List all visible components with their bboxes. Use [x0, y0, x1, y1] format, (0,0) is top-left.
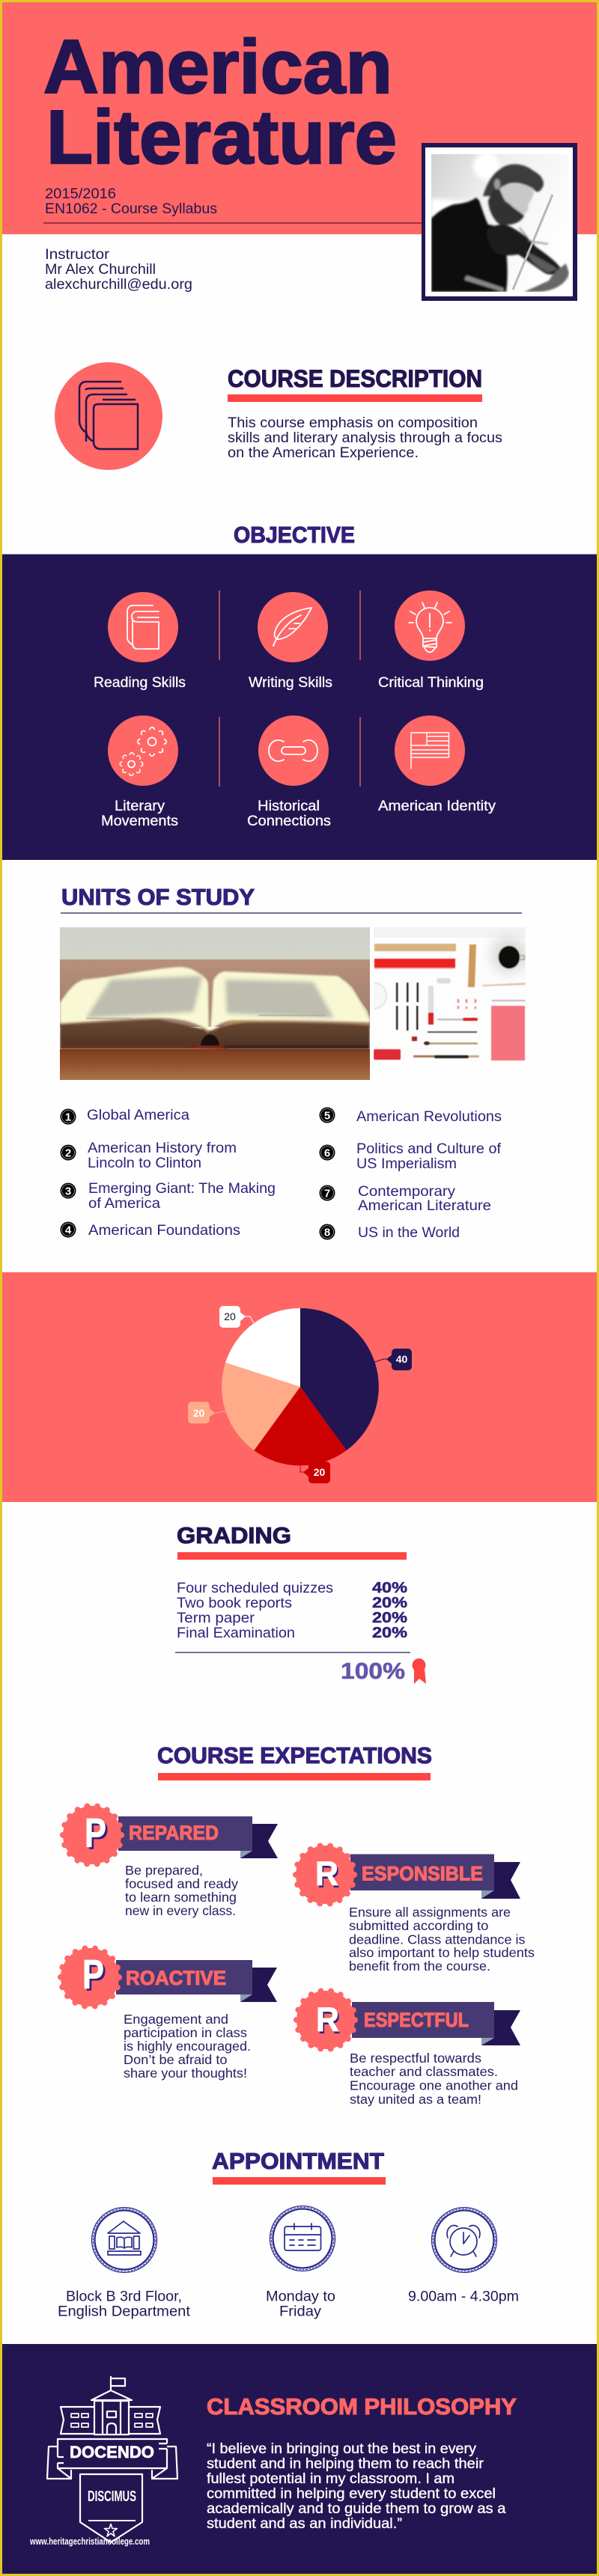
text block: teacher and classmates. — [350, 2064, 498, 2079]
icon: alarm clock — [431, 2208, 497, 2272]
text block: quote: student and as an individual.” — [207, 2516, 402, 2532]
text block: new in every class. — [125, 1903, 236, 1918]
text block: objective labels — [94, 675, 496, 829]
badge: P — [85, 1810, 106, 1856]
shield — [80, 2474, 142, 2542]
icon: location building — [91, 2208, 157, 2272]
text block: instructor: alexchurchill@edu.org — [45, 277, 192, 293]
building — [61, 2376, 160, 2435]
callout: 40 navy — [374, 1349, 412, 1370]
badge — [296, 1846, 354, 1904]
text block: course code: EN1062 - Course Syllabus — [45, 201, 217, 217]
text block: to learn something — [125, 1890, 237, 1905]
icon: reading skills — [108, 592, 178, 662]
text block: appointment details — [58, 2289, 519, 2320]
list item 6: Politics and Culture of — [356, 1141, 502, 1157]
icon: american identity — [395, 715, 465, 786]
text block: course description — [228, 415, 502, 461]
list item 2: Lincoln to Clinton — [88, 1156, 201, 1171]
expectation: proactive: ROACTIVE — [126, 1967, 226, 1989]
text block: course code: 2015/2016 — [45, 186, 116, 202]
heading: grading — [177, 1522, 407, 1560]
text block: quote: academically and to guide them to grow as a — [207, 2501, 506, 2517]
text block: course description: skills and literary analysis through a focus — [228, 430, 502, 446]
photo: violinist in framed portrait — [422, 143, 577, 301]
text block: objective labels: Historical — [258, 799, 320, 814]
list item 5: American Revolutions — [356, 1109, 502, 1125]
panel: objective — [2, 554, 597, 860]
heading: units of study: UNITS OF STUDY — [61, 884, 255, 910]
list item 2 — [60, 1141, 237, 1171]
list item 7 — [319, 1184, 491, 1214]
text block: appointment details: English Department — [58, 2304, 191, 2320]
heading: course expectations — [157, 1742, 432, 1780]
text block: deadline. Class attendance is — [349, 1932, 526, 1947]
list item 4: American Foundations — [88, 1223, 240, 1239]
text block: benefit from the course. — [349, 1959, 490, 1974]
text block: appointment details: 9.00am - 4.30pm — [408, 2289, 519, 2305]
list item 7: Contemporary — [358, 1184, 456, 1200]
text block: Be prepared, — [125, 1863, 203, 1878]
heading: classroom philosophy: CLASSROOM PHILOSOPHY — [207, 2393, 517, 2420]
list item 5: 5 — [324, 1109, 330, 1123]
banner — [47, 2439, 177, 2479]
heading: grading: GRADING — [177, 1522, 291, 1548]
expectation: proactive — [61, 1948, 277, 2081]
table: grading breakdown: Four scheduled quizzes — [177, 1581, 333, 1596]
shield: DISCIMUS — [88, 2488, 136, 2505]
list item 2: 2 — [65, 1147, 71, 1160]
text block: participation in class — [124, 2025, 247, 2040]
list item 2: American History from — [88, 1141, 237, 1156]
total: 100 percent: 100% — [341, 1658, 405, 1684]
badge — [297, 1991, 355, 2049]
text block: focused and ready — [125, 1876, 238, 1891]
badge: P — [87, 1812, 109, 1858]
heading: appointment — [212, 2148, 386, 2185]
text block: Engagement and — [124, 2012, 228, 2027]
watermark: www.heritagechristiancollege.com — [29, 2536, 150, 2547]
text block: objective labels: Writing Skills — [249, 675, 332, 691]
table: grading breakdown: Term paper — [177, 1611, 255, 1626]
icon: rosette — [412, 1658, 426, 1684]
list item 1: Global America — [87, 1108, 189, 1123]
text block: objective labels: Movements — [101, 814, 178, 829]
list item 7: 7 — [324, 1187, 330, 1200]
text block: Don’t be afraid to — [124, 2052, 228, 2067]
expectation: prepared — [63, 1806, 278, 1918]
chart: grading pie — [188, 1306, 412, 1483]
table: grading breakdown — [175, 1580, 410, 1653]
text block — [125, 1863, 238, 1918]
badge: R — [317, 2003, 341, 2041]
table: grading breakdown: Final Examination — [177, 1626, 295, 1641]
badge: R — [316, 2000, 339, 2039]
text block — [124, 2012, 251, 2081]
text block: instructor: Instructor — [45, 247, 110, 263]
text block: objective labels: Literary — [115, 799, 165, 814]
callout: 40 navy: 40 — [396, 1353, 407, 1365]
text block: Encourage one another and — [350, 2078, 518, 2093]
list item 6: 6 — [324, 1147, 330, 1160]
text block: is highly encouraged. — [124, 2039, 251, 2054]
heading: objective: OBJECTIVE — [234, 522, 355, 548]
ribbon — [352, 2002, 520, 2045]
text block: appointment details: Monday to — [266, 2289, 335, 2305]
badge: P — [82, 1951, 104, 1997]
icon: writing skills — [258, 592, 328, 662]
heading: course expectations: COURSE EXPECTATIONS — [157, 1742, 432, 1768]
text block: objective labels: American Identity — [378, 799, 496, 814]
list item 4: 4 — [65, 1224, 72, 1236]
text block: quote: student and in helping them to reach their — [207, 2456, 484, 2472]
text block: instructor — [45, 247, 192, 293]
badge: P — [85, 1953, 106, 2000]
title: American — [43, 25, 392, 109]
expectation: responsible: ESPONSIBLE — [362, 1862, 483, 1884]
icon: school crest — [47, 2376, 177, 2542]
text block: quote: fullest potential in my classroom. I am — [207, 2471, 454, 2487]
title: Literature — [46, 96, 397, 180]
text block: quote: committed in helping every student to excel — [207, 2486, 496, 2502]
list item 3 — [60, 1181, 276, 1212]
icon: critical thinking — [395, 590, 465, 661]
list item 3: of America — [88, 1196, 160, 1212]
ribbon — [116, 1960, 277, 2002]
text block: quote — [207, 2441, 506, 2532]
list item 6 — [319, 1141, 502, 1172]
ribbon — [118, 1816, 278, 1858]
list item 8 — [319, 1224, 460, 1241]
badge — [61, 1948, 119, 2006]
text block — [349, 1905, 535, 1974]
text block: appointment details: Friday — [279, 2304, 322, 2320]
list item 5 — [319, 1108, 502, 1125]
expectation: respectful — [297, 1991, 520, 2107]
text block: objective labels: Critical Thinking — [378, 675, 484, 691]
text block: appointment details: Block B 3rd Floor, — [66, 2289, 182, 2305]
text block: course description: on the American Experience. — [228, 445, 419, 461]
badge: R — [317, 1857, 340, 1895]
text block: objective labels: Reading Skills — [94, 675, 186, 691]
callout: 20 white: 20 — [224, 1310, 236, 1322]
banner: DOCENDO — [70, 2443, 154, 2461]
icon: calendar — [270, 2206, 335, 2271]
expectation: respectful: ESPECTFUL — [364, 2009, 469, 2031]
badge — [63, 1806, 121, 1864]
table: grading breakdown: Two book reports — [177, 1596, 292, 1611]
ribbon — [350, 1855, 520, 1899]
text block: stay united as a team! — [350, 2092, 481, 2107]
text block: course code — [45, 186, 217, 217]
callout: 20 peach — [188, 1402, 226, 1423]
callout: 20 red — [300, 1462, 330, 1483]
text block: quote: “I believe in bringing out the best in every — [207, 2441, 477, 2457]
list item 1 — [60, 1108, 189, 1124]
callout: 20 peach: 20 — [193, 1407, 204, 1419]
text block: submitted according to — [349, 1918, 488, 1933]
icon: course description books — [55, 362, 162, 470]
list: units of study — [60, 1108, 502, 1241]
heading: course description: COURSE DESCRIPTION — [228, 365, 482, 392]
image: stationery flat lay — [374, 927, 527, 1061]
text block: course description: This course emphasis on composition — [228, 415, 478, 431]
heading: course description — [228, 365, 482, 402]
text block — [350, 2051, 518, 2107]
table: grading breakdown: 40% — [372, 1580, 407, 1596]
list item 3: 3 — [65, 1185, 71, 1197]
table: grading breakdown: 20% — [372, 1610, 407, 1626]
expectation: responsible — [296, 1846, 535, 1974]
list item 3: Emerging Giant: The Making — [88, 1181, 276, 1197]
list item 8: 8 — [324, 1226, 330, 1239]
list item 8: US in the World — [358, 1225, 460, 1241]
text block: Ensure all assignments are — [349, 1905, 511, 1920]
heading: appointment: APPOINTMENT — [212, 2148, 384, 2174]
panel: header band — [2, 2, 597, 234]
text block: also important to help students — [349, 1945, 535, 1960]
callout: 20 white — [219, 1306, 254, 1328]
list item 6: US Imperialism — [356, 1156, 457, 1172]
title — [43, 25, 397, 180]
text block: instructor: Mr Alex Churchill — [45, 262, 156, 278]
callout: 20 red: 20 — [314, 1466, 325, 1478]
icon: historical connections — [258, 715, 329, 786]
text block: Be respectful towards — [350, 2051, 481, 2066]
icon: literary movements — [108, 715, 178, 786]
panel: classroom philosophy — [2, 2344, 597, 2574]
image: open book on table — [60, 927, 370, 1080]
table: grading breakdown: 20% — [372, 1625, 407, 1641]
panel: grade chart band — [2, 1272, 597, 1502]
text block: objective labels: Connections — [247, 814, 331, 829]
text block: share your thoughts! — [124, 2066, 247, 2081]
list item 7: American Literature — [358, 1198, 491, 1214]
table: grading breakdown: 20% — [372, 1595, 407, 1611]
expectation: prepared: REPARED — [129, 1822, 219, 1844]
badge: R — [315, 1855, 338, 1893]
list item 1: 1 — [65, 1111, 71, 1124]
